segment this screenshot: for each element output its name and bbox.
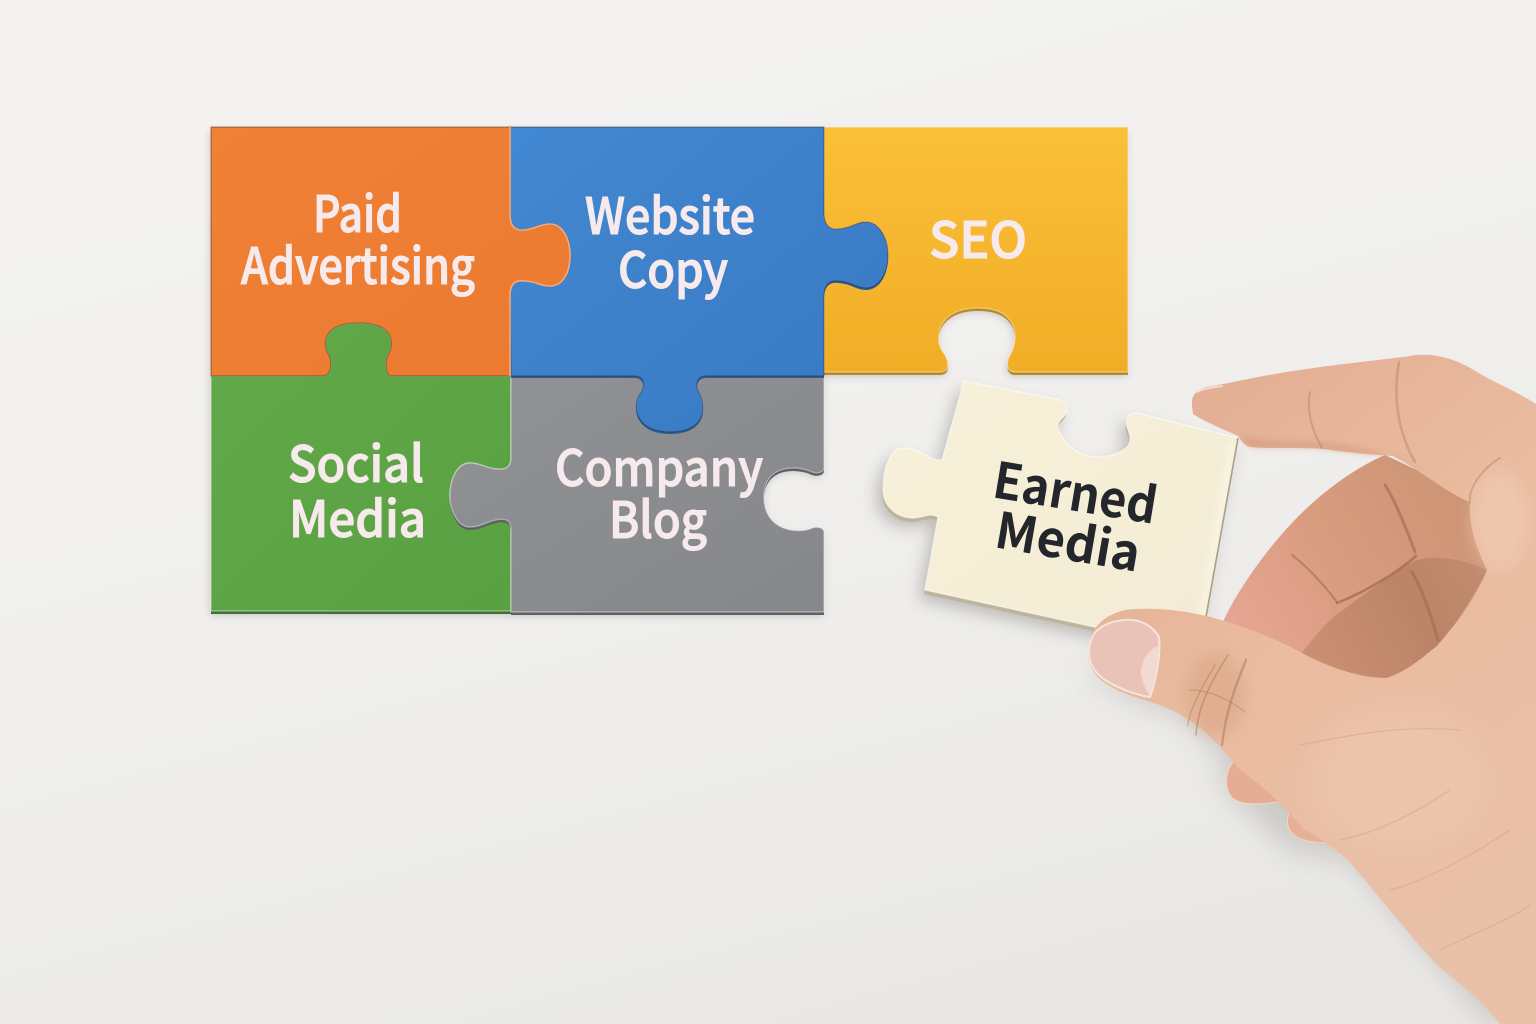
label: Website Copy: Copy	[618, 231, 728, 303]
piece shadow	[877, 390, 1232, 659]
thumb nail	[1089, 620, 1159, 697]
nail half moon	[1141, 645, 1159, 695]
label: Company Blog: Company	[555, 429, 763, 501]
ring finger	[1300, 558, 1488, 690]
panel: orange piece Paid Advertising	[211, 127, 570, 376]
illustration: hand holding piece	[1088, 355, 1536, 1024]
panel: blue piece Website Copy	[510, 127, 888, 434]
middle finger	[1223, 455, 1495, 690]
label: Social Media: Media	[289, 480, 426, 552]
hand shadow	[1088, 664, 1536, 1024]
label: Social Media	[288, 425, 426, 552]
label: Website Copy: Website	[585, 177, 755, 249]
back of hand highlight	[1310, 710, 1490, 850]
puzzle assembly	[211, 127, 1128, 615]
label: Company Blog: Blog	[609, 481, 707, 553]
panel: yellow piece SEO	[824, 127, 1128, 375]
label: Earned Media: Earned	[989, 441, 1163, 539]
panel: green piece Social Media	[211, 323, 511, 614]
index fingertip highlight	[1197, 386, 1222, 392]
label: Website Copy	[585, 177, 755, 303]
panel: gray piece Company Blog	[450, 376, 824, 615]
knuckle folds	[1309, 362, 1500, 502]
back of hand lines	[1300, 729, 1530, 950]
label: Paid Advertising	[241, 175, 475, 299]
finger creases	[1292, 485, 1438, 640]
pinky finger	[1288, 790, 1375, 843]
panel: cream piece Earned Media	[882, 381, 1238, 654]
thumb knuckle creases	[1188, 655, 1246, 745]
label: Paid Advertising: Advertising	[241, 227, 475, 299]
index finger shading	[1240, 436, 1465, 497]
label: Company Blog	[555, 429, 763, 553]
label: Social Media: Social	[288, 425, 424, 497]
label: Earned Media: Media	[990, 491, 1147, 587]
label: SEO: SEO	[929, 201, 1027, 273]
thumb joint blotch	[1185, 653, 1245, 737]
label: Paid Advertising: Paid	[313, 175, 402, 247]
puzzle shadow	[210, 131, 1127, 616]
knuckle highlight	[1472, 470, 1528, 570]
hand body with index finger and thumb	[1088, 355, 1536, 1024]
ring finger tip	[1227, 750, 1320, 804]
label: Earned Media	[989, 441, 1163, 587]
